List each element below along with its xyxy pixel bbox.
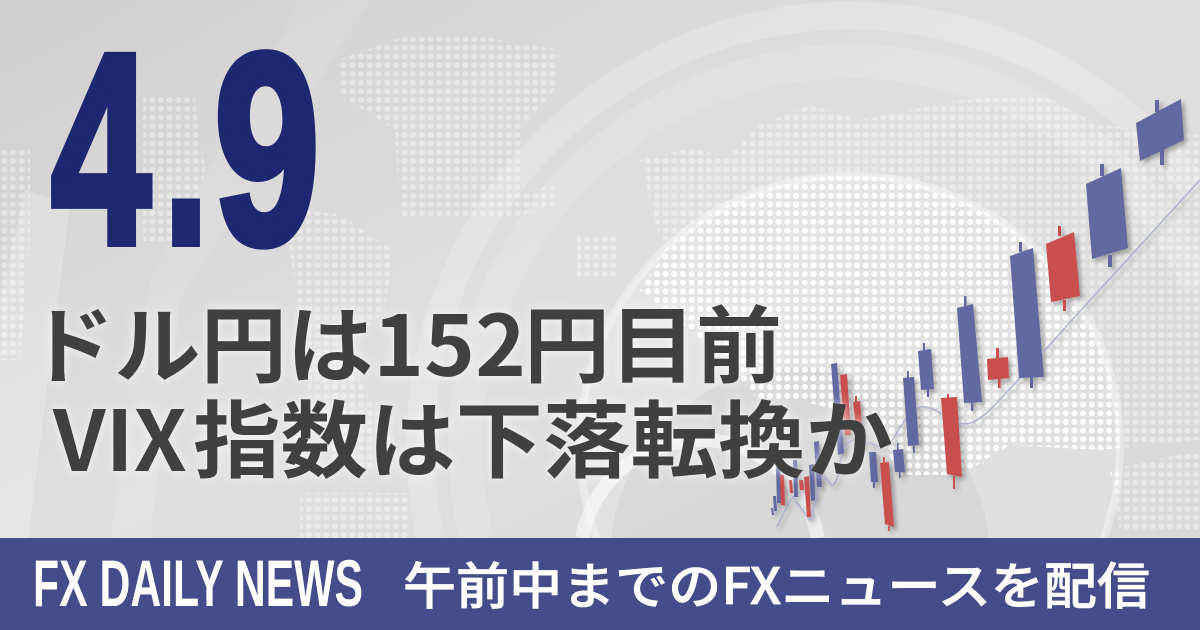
small candles — [771, 363, 878, 515]
blue candle F — [957, 296, 982, 411]
blue candle A — [1136, 99, 1184, 165]
headline line 2: 指数は下落転換か — [193, 375, 893, 496]
blue candle B — [1086, 164, 1128, 267]
candlestick chart — [771, 99, 1200, 531]
headline — [28, 280, 893, 496]
date heading: . — [163, 0, 209, 301]
red candle C — [1046, 226, 1080, 311]
date heading: 4 — [51, 0, 151, 301]
banner title: FX DAILY NEWS — [33, 546, 363, 620]
trend line — [777, 180, 1200, 527]
blue candle I — [903, 371, 919, 453]
headline line 1: 円目前 — [524, 280, 782, 401]
footer banner — [0, 538, 1200, 630]
banner subtitle: 午前中までのFXニュースを配信 — [403, 547, 1150, 619]
date heading — [51, 0, 320, 301]
red candle K — [880, 457, 894, 531]
blue candle J — [893, 443, 905, 478]
headline line 2: VIX — [52, 375, 187, 496]
red candle E — [987, 348, 1009, 388]
blue candle D — [1010, 242, 1044, 388]
headline line 1: ドル円は152 — [28, 280, 526, 401]
headline line 1 — [28, 280, 782, 401]
blue candle H — [918, 343, 934, 397]
date heading: 9 — [214, 0, 320, 301]
red candle G — [941, 394, 962, 489]
